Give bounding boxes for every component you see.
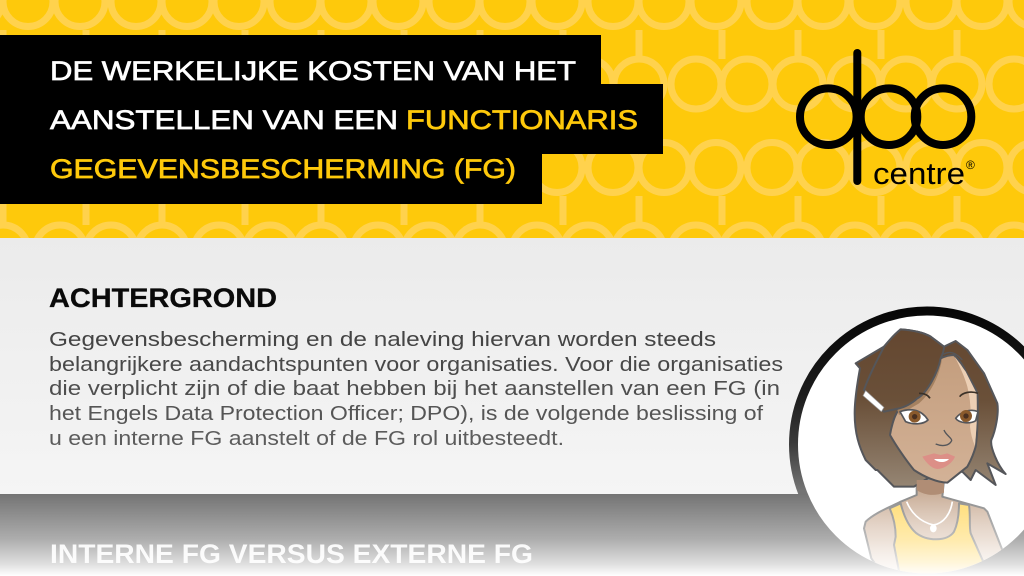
necklace: [907, 502, 952, 525]
title text: [50, 56, 638, 184]
necklace pendant: [930, 524, 937, 532]
body text: die verplicht zijn of die baat hebben bij het aanstellen van een FG (in: [49, 378, 780, 400]
nose: [936, 430, 952, 446]
title text: FUNCTIONARIS: [406, 105, 638, 135]
lower section fade: [0, 494, 1024, 576]
face shadow: [897, 359, 942, 415]
lower section background: [0, 494, 1024, 576]
logo: dpo centre: [800, 49, 975, 191]
fringe: [864, 329, 944, 412]
panel: achtergrond: [0, 238, 1024, 494]
black stepped title panel: [0, 35, 663, 204]
title text: GEGEVENSBESCHERMING (FG): [50, 154, 516, 184]
lips: [922, 453, 955, 469]
back hair: [855, 329, 1006, 487]
ring: [794, 311, 1024, 576]
illustrated woman: [855, 329, 1006, 576]
face highlight: [955, 357, 977, 446]
heading: interne FG versus externe FG: INTERNE FG VERSUS EXTERNE FG: [50, 539, 533, 569]
logo: dpo centre: centre: [873, 156, 965, 191]
teeth: [934, 459, 949, 462]
hair clip: [863, 391, 884, 412]
left eye: [900, 410, 928, 424]
body text: Gegevensbescherming en de naleving hiervan worden steeds: [49, 329, 716, 351]
neck shadow: [917, 480, 944, 495]
right eye: [956, 410, 978, 423]
yellow header background: [0, 0, 1024, 238]
brows: [919, 392, 978, 398]
title block: [0, 35, 663, 204]
title text: AANSTELLEN VAN EEN: [50, 105, 398, 135]
title text: DE WERKELIJKE KOSTEN VAN HET: [50, 56, 576, 86]
face: [890, 355, 978, 483]
body text: belangrijkere aandachtspunten voor organisaties. Voor die organisaties: [49, 354, 783, 376]
portrait in circle: [794, 311, 1024, 576]
body text: het Engels Data Protection Officer; DPO), is de volgende beslissing of: [49, 403, 764, 425]
shoulders: [864, 480, 1002, 576]
body text: [49, 329, 783, 450]
body text: u een interne FG aanstelt of de FG rol uitbesteedt.: [49, 428, 564, 450]
tank top: [890, 503, 987, 576]
hair arch over forehead: [943, 353, 962, 360]
heading: achtergrond: ACHTERGROND: [49, 283, 277, 313]
logo: dpo centre: ®: [966, 158, 975, 172]
